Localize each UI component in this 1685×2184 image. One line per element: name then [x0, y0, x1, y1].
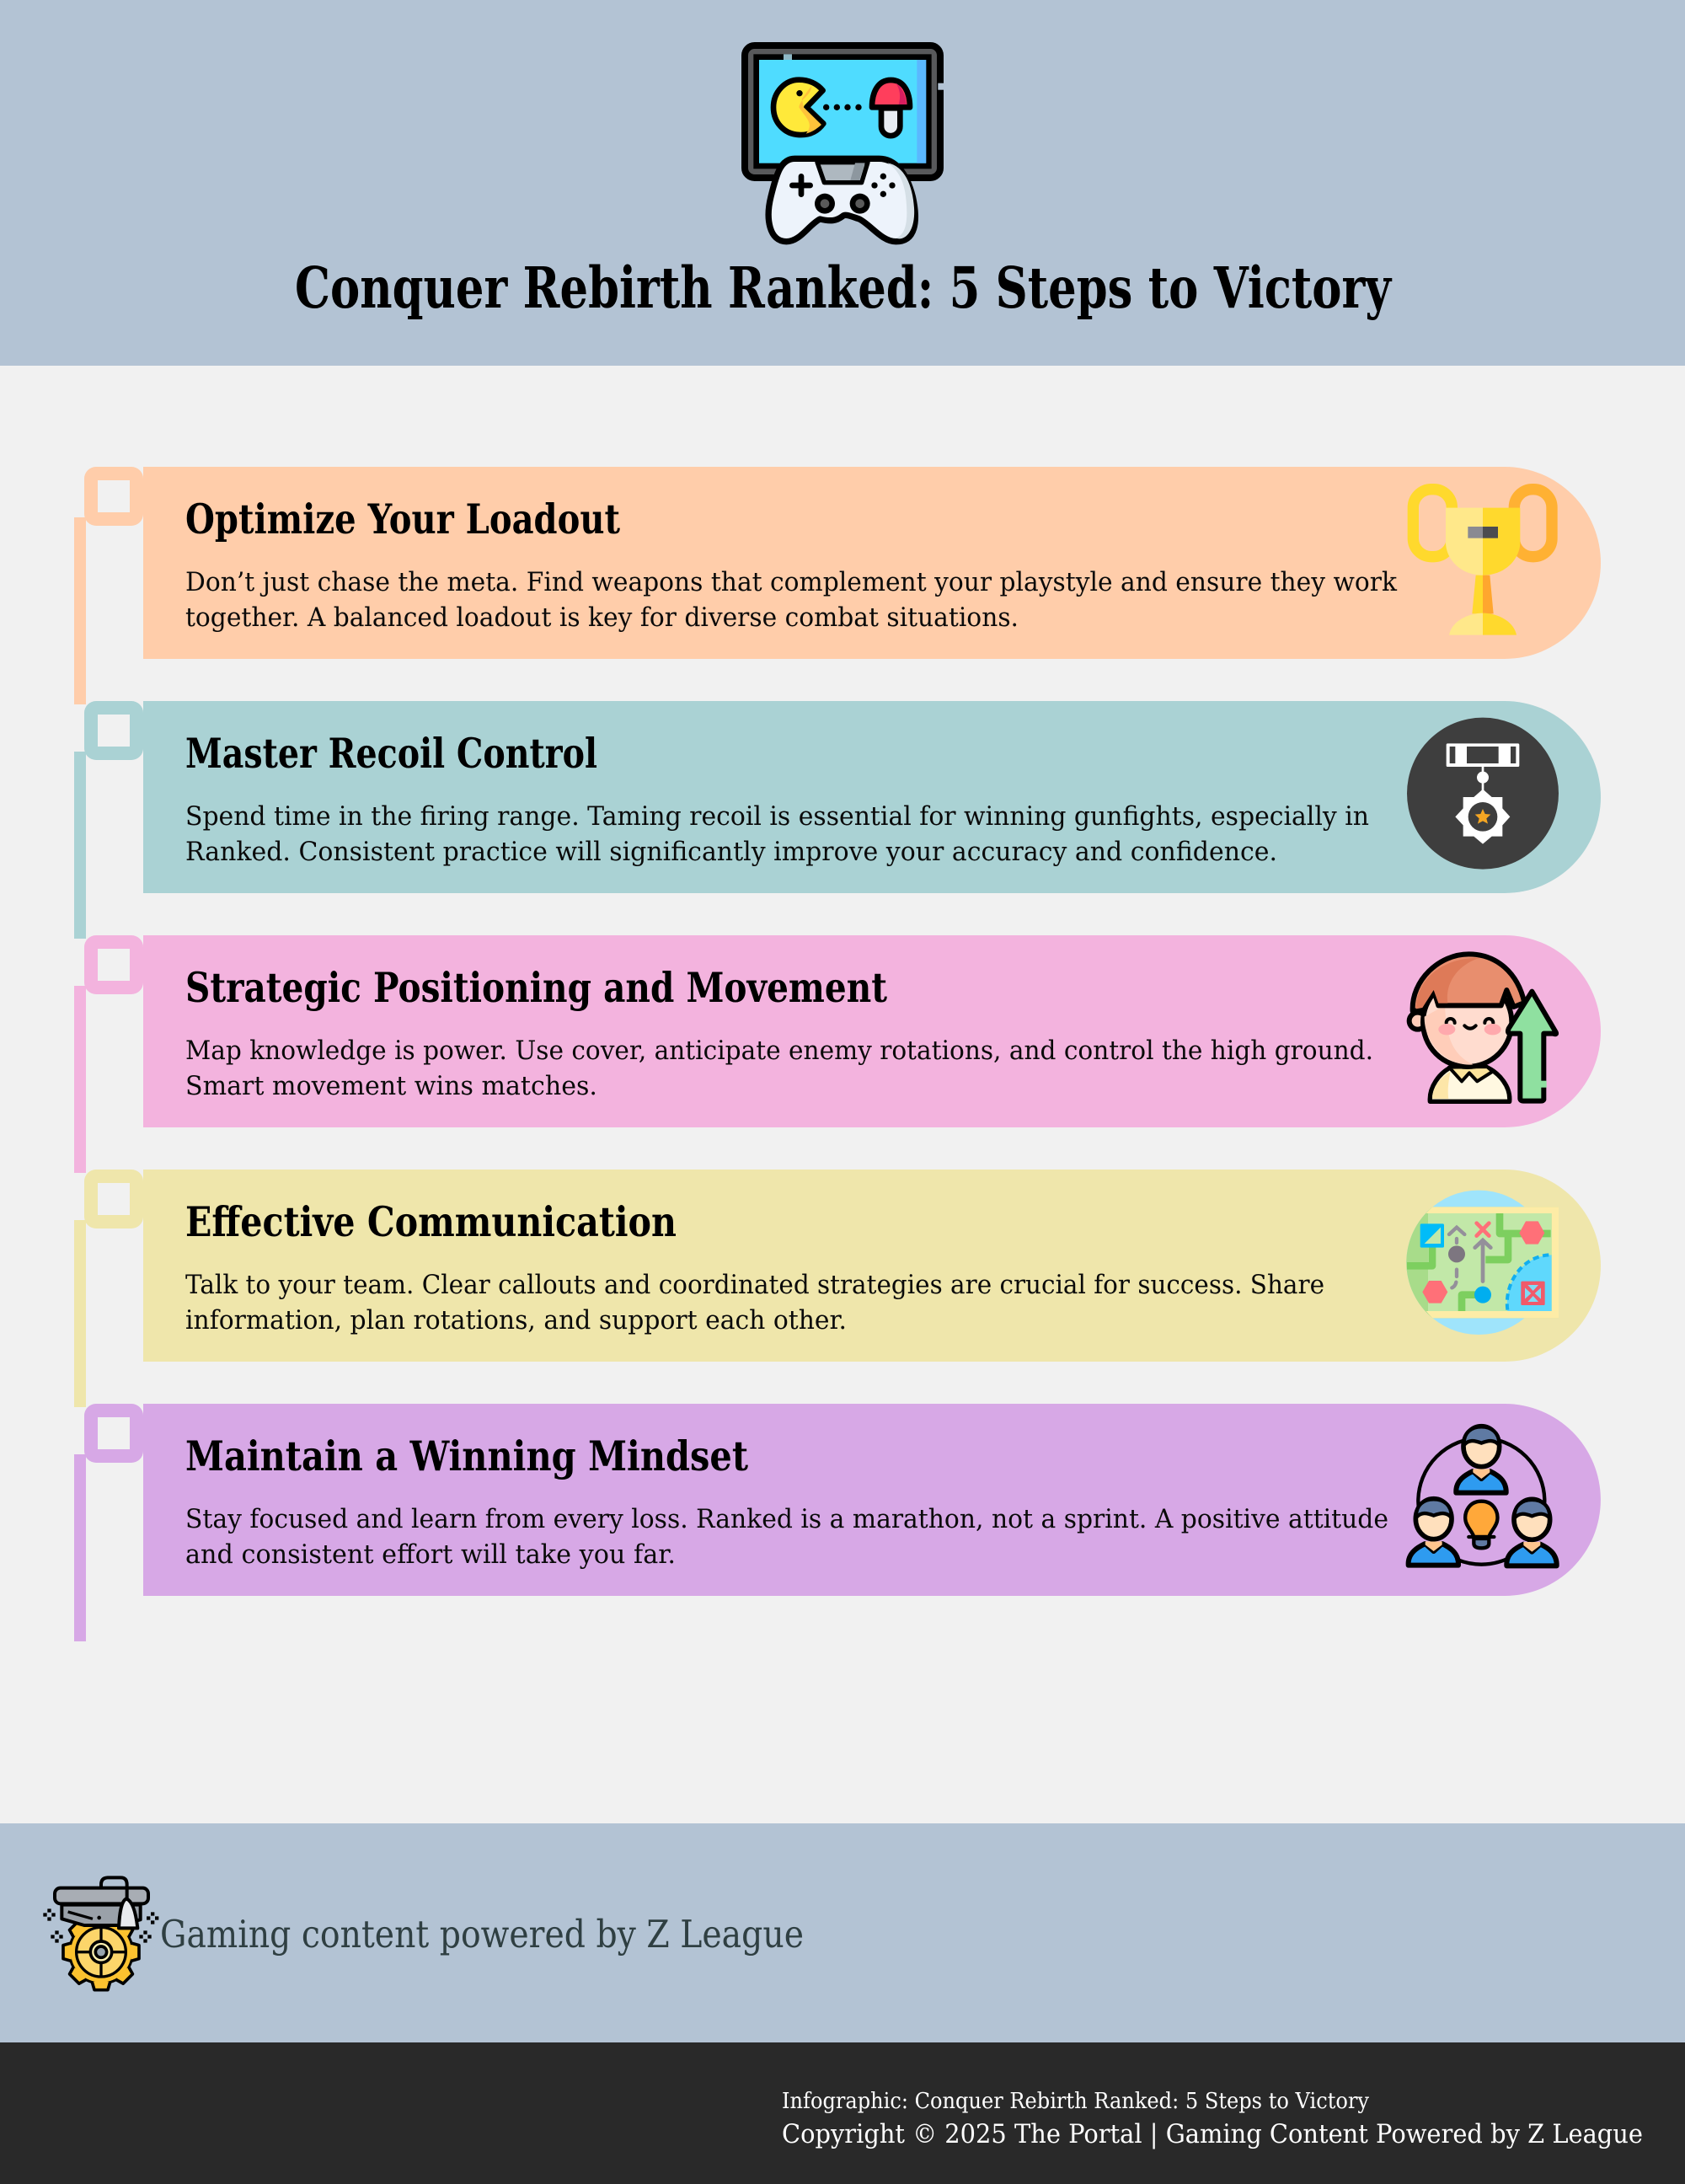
header band — [0, 0, 1685, 366]
icon: game monitor and controller — [745, 46, 944, 242]
timeline connector 5 — [74, 1454, 86, 1641]
step 2 panel — [74, 701, 1601, 939]
step 4 body text: information, plan rotations, and support each other. — [185, 1305, 847, 1336]
step 1 card — [143, 467, 1601, 659]
step 2 body text — [185, 801, 1369, 867]
footer text: Copyright © 2025 The Portal | Gaming Content Powered by Z League — [782, 2119, 1643, 2149]
step 5 panel — [74, 1404, 1601, 1641]
step 1 body text: together. A balanced loadout is key for diverse combat situations. — [185, 602, 1019, 633]
icon: graduation cap on gear logo — [43, 1877, 158, 1990]
step 3 marker — [84, 935, 143, 994]
step 2 card — [143, 701, 1601, 893]
step 5 card — [143, 1404, 1601, 1596]
step 4 panel — [74, 1170, 1601, 1407]
step 2 body text: Ranked. Consistent practice will significantly improve your accuracy and confidence. — [185, 837, 1277, 867]
icon: medal — [1407, 718, 1559, 870]
icon: trophy — [1413, 490, 1552, 635]
step 1 panel — [74, 467, 1601, 704]
timeline connector 3 — [74, 986, 86, 1173]
timeline connector 4 — [74, 1220, 86, 1407]
step 3 card — [143, 935, 1601, 1127]
step 1 marker — [84, 467, 143, 526]
branding band — [0, 1823, 1685, 2042]
icon: team with lightbulb — [1409, 1427, 1557, 1566]
footer text — [782, 2089, 1643, 2149]
step 4 card — [143, 1170, 1601, 1362]
step 2 heading: Master Recoil Control — [185, 729, 597, 778]
step 2 body text: Spend time in the firing range. Taming recoil is essential for winning gunfights, especially in — [185, 801, 1369, 832]
icon: smiling kid with up arrow — [1410, 954, 1556, 1101]
step 5 body text — [185, 1504, 1388, 1570]
timeline connector 2 — [74, 752, 86, 939]
copyright band — [0, 2042, 1685, 2184]
icon: tactical map — [1406, 1191, 1559, 1335]
step 5 body text: and consistent effort will take you far. — [185, 1539, 676, 1570]
step 1 body text: Don’t just chase the meta. Find weapons that complement your playstyle and ensure they work — [185, 567, 1397, 597]
step 5 heading: Maintain a Winning Mindset — [185, 1432, 748, 1480]
step 5 marker — [84, 1404, 143, 1463]
step 2 marker — [84, 701, 143, 760]
step 4 body text — [185, 1270, 1324, 1336]
step 4 heading: Effective Communication — [185, 1197, 677, 1246]
step 1 heading: Optimize Your Loadout — [185, 495, 620, 543]
step 5 body text: Stay focused and learn from every loss. Ranked is a marathon, not a sprint. A positive attitude — [185, 1504, 1388, 1534]
step 3 heading: Strategic Positioning and Movement — [185, 963, 887, 1012]
step 4 marker — [84, 1170, 143, 1228]
step 3 body text: Smart movement wins matches. — [185, 1071, 597, 1101]
step 3 body text — [185, 1036, 1373, 1101]
footer text: Infographic: Conquer Rebirth Ranked: 5 Steps to Victory — [782, 2089, 1369, 2114]
step 1 body text — [185, 567, 1397, 633]
title: Conquer Rebirth Ranked: 5 Steps to Victory — [295, 254, 1393, 321]
step 3 panel — [74, 935, 1601, 1173]
timeline connector 1 — [74, 517, 86, 704]
step 3 body text: Map knowledge is power. Use cover, anticipate enemy rotations, and control the high ground. — [185, 1036, 1373, 1066]
branding text: Gaming content powered by Z League — [160, 1912, 804, 1956]
step 4 body text: Talk to your team. Clear callouts and coordinated strategies are crucial for success. Share — [185, 1270, 1324, 1300]
